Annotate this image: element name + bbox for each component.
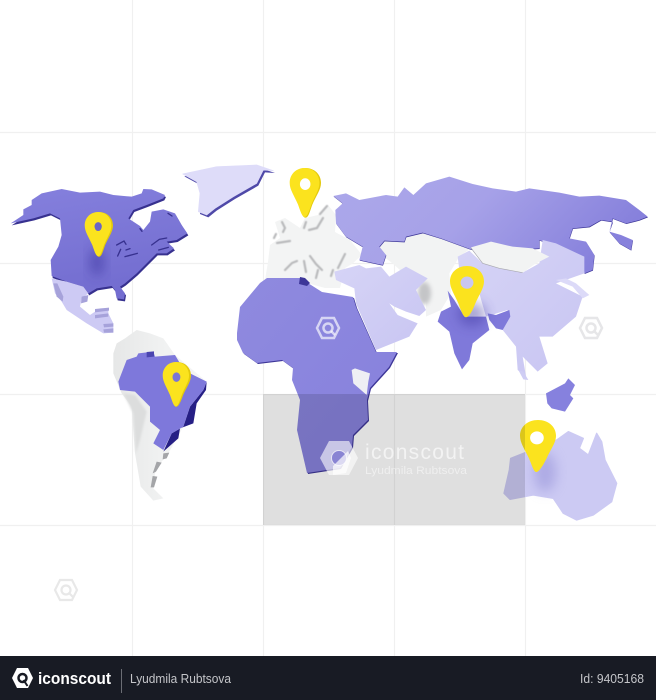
region: Brazil [118, 351, 207, 452]
pin: Brazil [163, 362, 191, 407]
pin: North America [85, 212, 113, 257]
watermark icon: right [580, 318, 602, 338]
region: Greenland [183, 165, 275, 217]
footer id: Id: 9405168 [580, 672, 644, 686]
region: North America [11, 189, 188, 301]
footer logo icon [12, 668, 33, 688]
region: Australia [504, 432, 617, 520]
region: Russia [333, 177, 648, 274]
region: New Guinea [518, 370, 575, 412]
pin: India [450, 266, 484, 317]
footer author name: Lyudmila Rubtsova [130, 672, 231, 686]
region: Europe [265, 205, 362, 288]
region: Central Asia [379, 233, 469, 317]
footer bar [0, 656, 656, 700]
grey watermark rectangle [263, 394, 525, 525]
region: Kenya [352, 368, 370, 395]
pin: Europe [290, 168, 321, 218]
watermark author text: Lyudmila Rubtsova [365, 465, 468, 477]
pin shadows [90, 248, 556, 492]
region: China and Southeast Asia [458, 240, 589, 377]
pin: Australia [520, 420, 556, 472]
watermark logo: large [320, 441, 358, 475]
watermark icon: center [317, 318, 339, 338]
region: Mongolia [471, 242, 549, 273]
small watermark icon: lower left [55, 580, 77, 600]
watermark brand text: iconscout [365, 441, 464, 464]
region: South America [113, 330, 207, 501]
region: Mexico and Central America [52, 278, 113, 333]
region: Middle East [334, 265, 428, 350]
footer brand name: iconscout [38, 669, 111, 688]
footer divider [121, 669, 122, 693]
region: Africa [237, 277, 398, 474]
region: India [438, 291, 510, 369]
